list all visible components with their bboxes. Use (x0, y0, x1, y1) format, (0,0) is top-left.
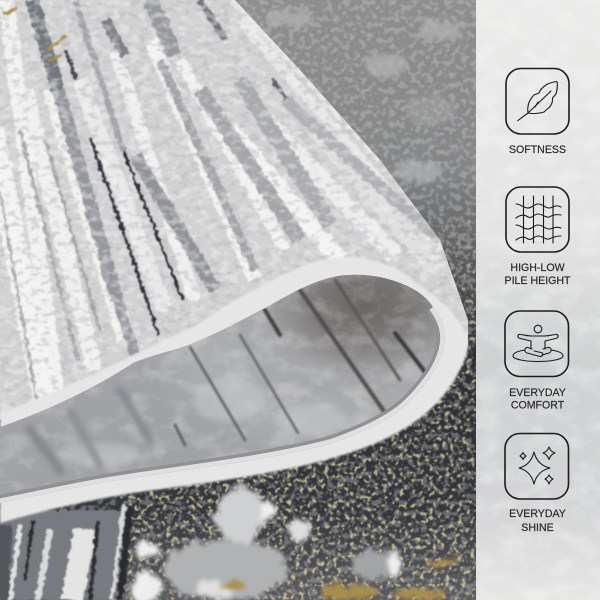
photo: rug floor background (0, 0, 476, 600)
icon: softness feather (506, 68, 569, 134)
label: everyday shine: EVERYDAY (509, 508, 566, 520)
photo: rug pile top face (0, 0, 480, 430)
photo: rug folded rim (0, 257, 468, 523)
photo: rug underside (0, 274, 445, 503)
accent: gold flecks on pile (2, 8, 66, 60)
label: high-low pile height (505, 262, 571, 287)
stitching: underside edge (0, 307, 445, 503)
label: everyday comfort (509, 387, 566, 412)
label: everyday comfort: COMFORT (511, 400, 565, 412)
label: everyday shine (509, 508, 566, 534)
panel: right sidebar background (476, 0, 600, 600)
label: everyday shine: SHINE (521, 522, 554, 534)
label: high-low pile height: HIGH-LOW (510, 262, 565, 274)
icon: everyday shine sparkles (505, 434, 568, 499)
label: high-low pile height: PILE HEIGHT (505, 275, 571, 287)
icon: everyday comfort yoga figure (505, 311, 568, 376)
label: everyday comfort: EVERYDAY (509, 387, 566, 399)
icon: high-low pile height (506, 187, 569, 252)
label: softness: SOFTNESS (509, 144, 566, 156)
stripes: floor bottom left (0, 505, 130, 600)
